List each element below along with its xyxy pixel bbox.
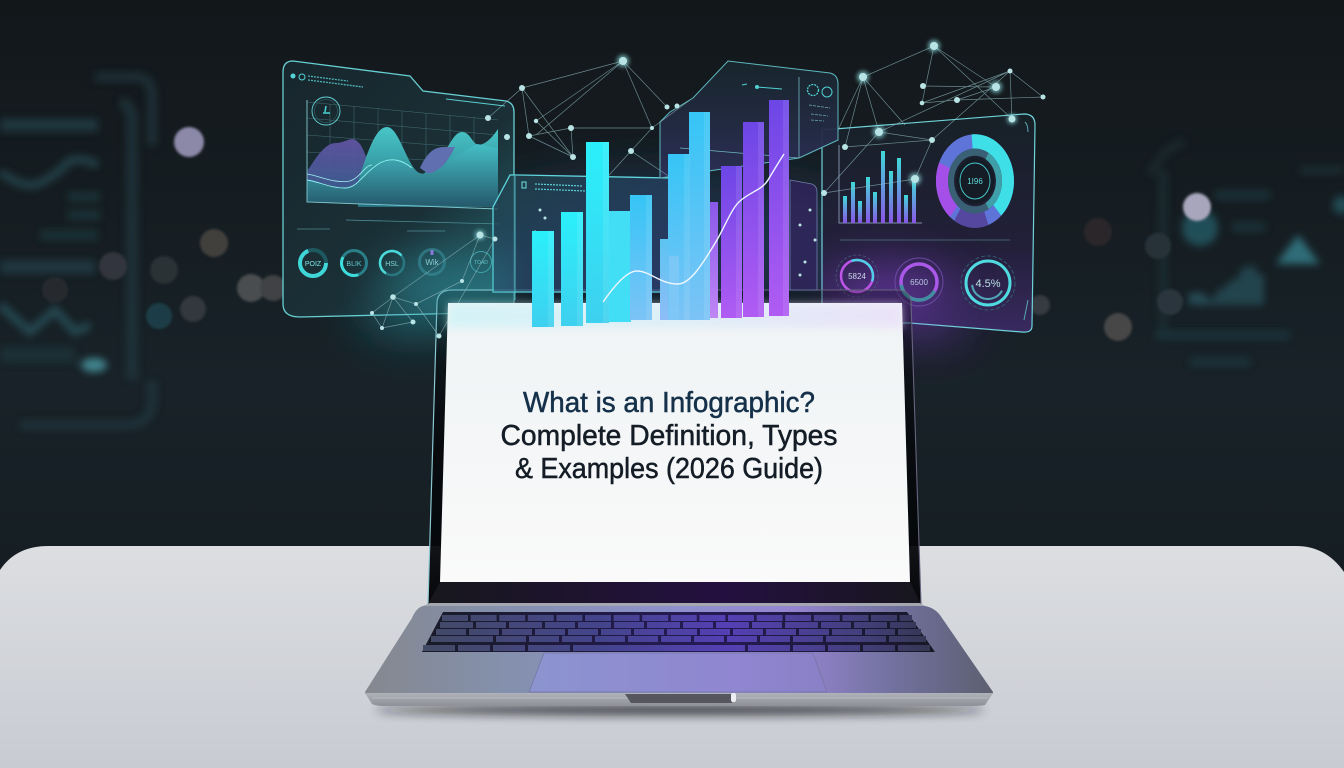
small ring gauge two: 6500 <box>910 278 928 287</box>
teal and purple glow <box>355 170 975 345</box>
small ring gauge two <box>894 257 944 307</box>
title: Complete Definition, Types <box>500 420 838 452</box>
title: What is an Infographic? <box>523 387 815 419</box>
small ring gauge one <box>836 255 878 297</box>
bar highlights <box>548 100 789 327</box>
teal fog over lower left panel <box>380 257 510 313</box>
donut gauges row: Wik <box>425 258 440 267</box>
big donut gauge <box>929 125 1021 237</box>
trackpad notch <box>625 693 736 703</box>
panel icons <box>742 84 832 121</box>
laptop shadow <box>375 705 985 715</box>
data network lines <box>372 46 1043 336</box>
donut gauges row <box>300 247 492 279</box>
chart grid <box>307 100 498 207</box>
divider lines <box>297 220 500 231</box>
donut gauges row: POIZ <box>305 261 322 268</box>
panel: area chart dashboard <box>283 61 514 317</box>
data network nodes <box>370 40 1046 338</box>
laptop lower screen bezel <box>428 582 921 604</box>
panel: right gauges dashboard <box>822 114 1035 332</box>
donut gauges row: BLIK <box>346 261 362 268</box>
title <box>500 387 838 485</box>
chart axis <box>307 100 498 209</box>
trackpad <box>529 653 827 692</box>
blurred left dashboard <box>0 77 152 425</box>
mini bar chart <box>839 145 922 223</box>
trend line <box>603 154 784 302</box>
panel: center glass panel <box>493 175 670 300</box>
keyboard <box>422 612 935 652</box>
title: & Examples (2026 Guide) <box>515 453 823 485</box>
laptop lid bezel <box>428 290 921 604</box>
small ring gauge three: 4.5% <box>975 278 1001 290</box>
area chart <box>307 127 498 207</box>
panel: lower purple glass panel <box>790 180 817 290</box>
laptop screen <box>440 303 910 582</box>
blurred right dashboard <box>1150 142 1344 362</box>
donut gauges row: HSL <box>385 261 399 268</box>
big donut gauge: 1I96 <box>967 177 983 186</box>
small ring gauge three <box>961 256 1015 310</box>
purple fog in right panel <box>828 266 952 318</box>
small ring gauge one: 5824 <box>848 272 866 281</box>
3D bar chart <box>532 100 789 327</box>
donut gauges row: TOAD <box>474 260 488 266</box>
table surface <box>0 546 1344 768</box>
panel header marks <box>290 74 505 106</box>
icon: chart badge ring <box>312 97 340 125</box>
laptop base <box>365 603 993 706</box>
panel: upper glass panel <box>660 61 838 178</box>
bokeh lights left <box>42 127 286 329</box>
bokeh lights right <box>1030 193 1211 341</box>
